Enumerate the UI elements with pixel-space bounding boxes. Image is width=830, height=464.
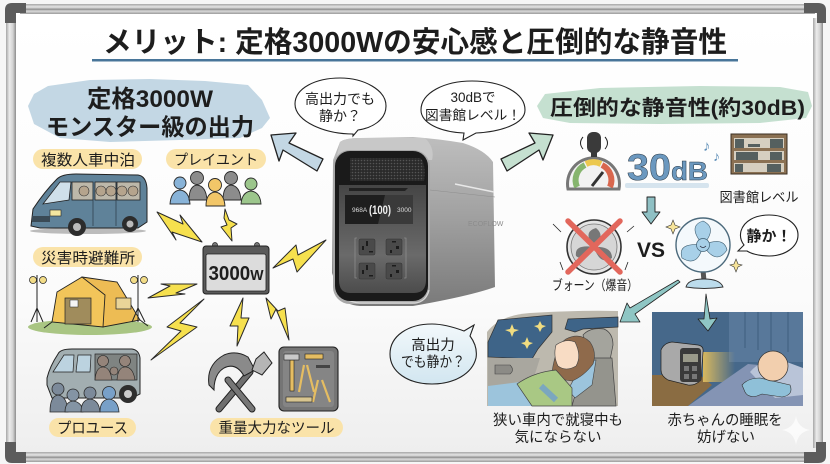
- battery 3000W: [203, 242, 269, 294]
- icon: music notes: ♪: [713, 148, 720, 164]
- speech bubble: quiet despite high output: [390, 324, 476, 384]
- value: 30dB: 30dB: [627, 147, 708, 188]
- vent grille: [350, 158, 424, 181]
- speech bubble: library level: 図書館レベル！: [425, 108, 521, 123]
- caption: car scene: [493, 412, 623, 446]
- speech bubble: quiet: [738, 215, 798, 256]
- speech bubble: quiet despite high output: でも静か？: [401, 354, 465, 371]
- icon: disaster tent: [28, 275, 152, 335]
- label: pro use: プロユース: [57, 420, 128, 437]
- icon: music notes: [703, 138, 720, 164]
- icon: crossed hammers: [209, 352, 272, 409]
- lightning bolts: [148, 209, 326, 360]
- speech bubble: high output yet quiet: 高出力でも: [305, 91, 375, 107]
- outlets: [359, 239, 402, 279]
- panel: quietness heading: [537, 86, 812, 124]
- panel: quietness heading: 圧倒的な静音性(約30dB): [550, 97, 805, 120]
- illustration: sleeping in car: [487, 311, 618, 406]
- panel: monster output heading: モンスター級の出力: [46, 114, 254, 140]
- display: [345, 195, 413, 224]
- control panel: [339, 185, 426, 293]
- label: multi-person car camping: 複数人車中泊: [41, 152, 135, 169]
- text: versus: VS: [637, 239, 665, 262]
- caption: car scene: 気にならない: [514, 429, 602, 446]
- power station device: ECOFLOW: [468, 221, 504, 228]
- speech bubble: quiet despite high output: 高出力: [411, 337, 455, 354]
- speech bubble: high output yet quiet: 静か？: [319, 108, 361, 124]
- label: library level: 図書館レベル: [720, 190, 798, 205]
- label: disaster shelter: 災害時避難所: [41, 250, 135, 267]
- icon: bookshelf: [731, 134, 787, 174]
- caption: baby scene: [668, 412, 782, 446]
- power station device: (100): [369, 205, 391, 217]
- label: play mount: プレイユント: [174, 152, 258, 169]
- label: loud noise: ブォーン（爆音）: [552, 277, 638, 293]
- icon: group of people: [170, 172, 261, 206]
- speech bubble: library level: [421, 81, 525, 140]
- decorative sparkle watermark: [782, 416, 810, 445]
- icon: sound level gauge: [568, 132, 620, 189]
- arrow: down to comparison: [642, 197, 660, 224]
- panel: monster output heading: [28, 79, 270, 142]
- icon: van with production crowd: [47, 349, 140, 412]
- speech bubble: library level: 30dBで: [450, 90, 496, 105]
- arrow: to car scene: [620, 280, 680, 322]
- label: play mount: [166, 149, 266, 169]
- caption: baby scene: 妨げない: [697, 429, 755, 446]
- power station device: 968A: [352, 207, 368, 214]
- illustration: sleeping baby: [652, 312, 803, 406]
- arrow: to output panel: [271, 133, 323, 171]
- icon: loud fan crossed out: [553, 220, 634, 274]
- panel: monster output heading: 定格3000W: [87, 86, 213, 113]
- label: heavy duty tools: 重量大力なツール: [218, 420, 334, 437]
- caption: car scene: 狭い車内で就寝中も: [493, 412, 623, 429]
- icon: blue van with passengers: [30, 174, 147, 236]
- icon: music notes: ♪: [703, 138, 710, 155]
- caption: baby scene: 赤ちゃんの睡眠を: [668, 412, 782, 429]
- arrow: to baby scene: [698, 294, 717, 331]
- power station device: [332, 137, 504, 306]
- speech bubble: quiet: 静か！: [746, 227, 792, 245]
- title: メリット: 定格3000Wの安心感と圧倒的な静音性: [103, 26, 727, 59]
- arrow: to quietness panel: [501, 133, 553, 171]
- power station device: 3000: [397, 207, 412, 214]
- speech bubble: high output yet quiet: [295, 78, 386, 136]
- icon: tool box: [279, 347, 338, 411]
- icon: quiet blue fan: [666, 218, 742, 288]
- battery 3000W: 3000W: [208, 263, 264, 285]
